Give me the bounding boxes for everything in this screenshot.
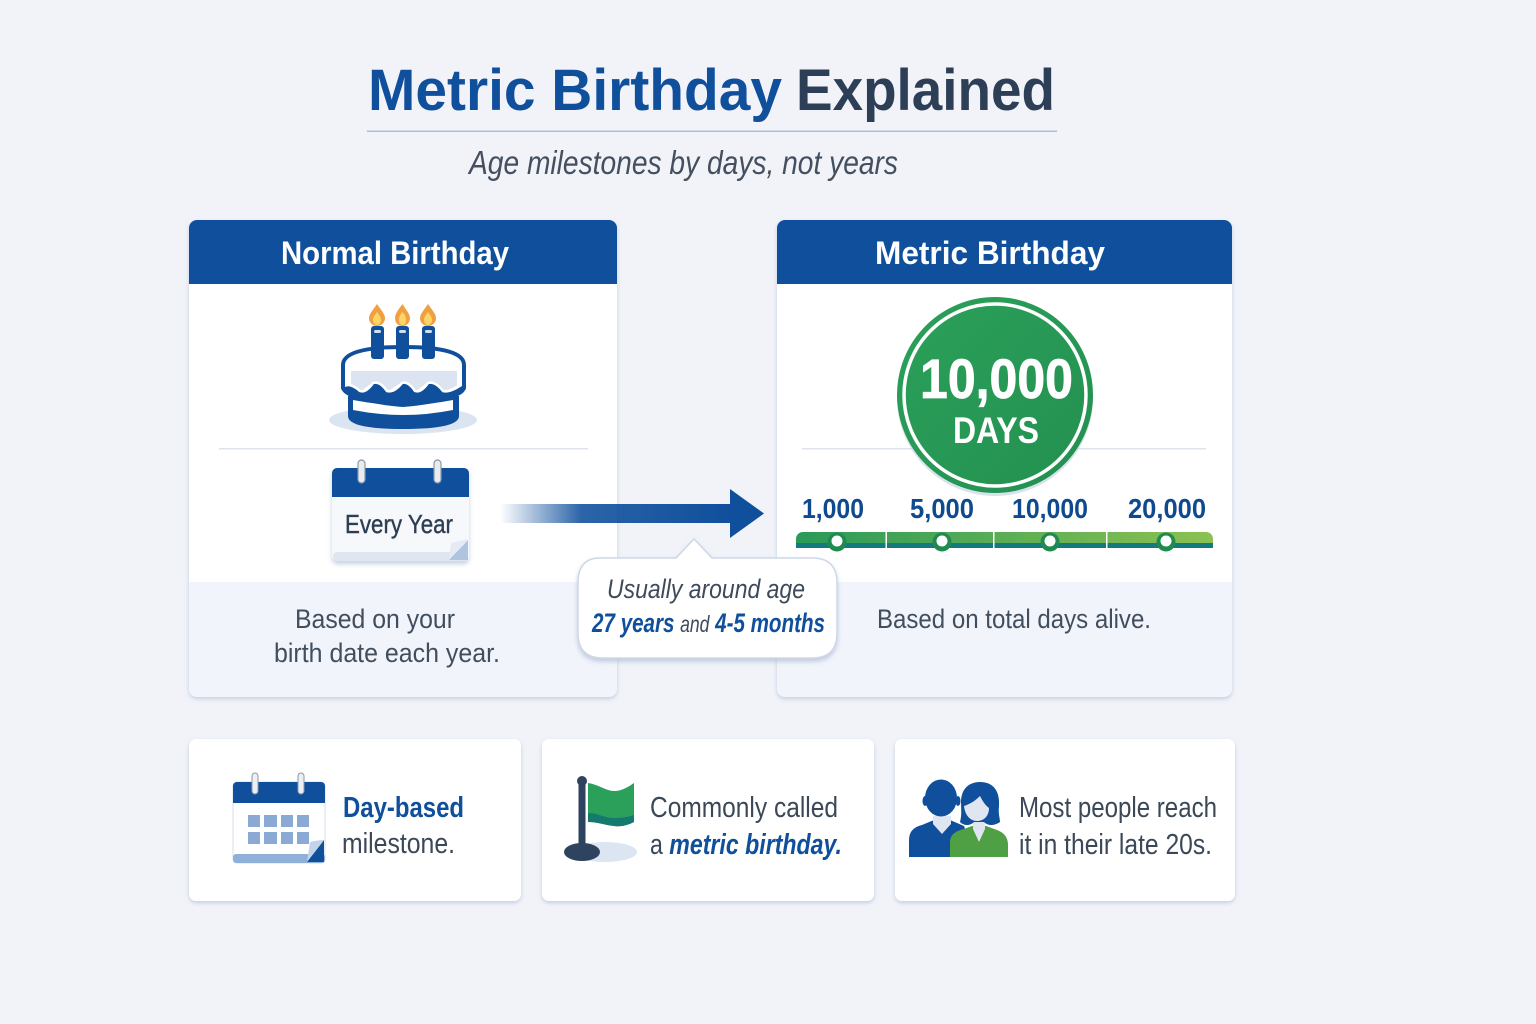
title: Metric Birthday [368,58,782,123]
icon: people [909,780,1008,857]
callout: usual age [578,539,837,658]
card: most people [895,739,1235,901]
card: commonly called [542,739,874,901]
title [368,58,1055,123]
timeline: 5,000 [910,493,974,524]
timeline: 10,000 [1012,493,1088,524]
caption: metric birthday: Based on total days alive. [877,604,1151,634]
timeline [796,493,1213,552]
timeline: 20,000 [1128,493,1206,524]
text: most people: it in their late 20s. [1019,829,1212,861]
caption: normal birthday: Based on your [295,604,455,634]
text: commonly called [650,792,842,861]
heading: metric birthday: Metric Birthday [875,235,1105,271]
text: commonly called: Commonly called [650,792,838,824]
icon: birthday cake [329,304,477,434]
heading: normal birthday: Normal Birthday [281,235,509,271]
badge: 10,000 days [897,297,1093,496]
title: Explained [796,58,1055,123]
text: day-based: Day-based [343,792,464,824]
subtitle: Age milestones by days, not years [467,144,898,181]
badge: 10,000 days: 10,000 [920,347,1073,410]
badge: 10,000 days: DAYS [953,410,1039,451]
label: every year: Every Year [345,509,453,539]
timeline: 1,000 [802,493,864,524]
text: day-based: milestone. [342,828,455,860]
callout: usual age: 27 years and 4-5 months [591,608,825,638]
arrow [500,489,764,538]
caption: normal birthday [274,604,500,668]
panel: normal birthday [189,220,617,697]
icon: calendar [233,773,325,863]
panel: metric birthday [777,220,1232,697]
card: day-based [189,739,521,901]
icon: every year calendar [332,460,469,561]
text: most people [1019,792,1217,861]
text: most people: Most people reach [1019,792,1217,824]
text: commonly called: a metric birthday. [650,829,842,861]
icon: flag [564,776,637,862]
text: day-based [342,792,464,860]
caption: normal birthday: birth date each year. [274,638,500,668]
callout: usual age: Usually around age [607,574,805,604]
